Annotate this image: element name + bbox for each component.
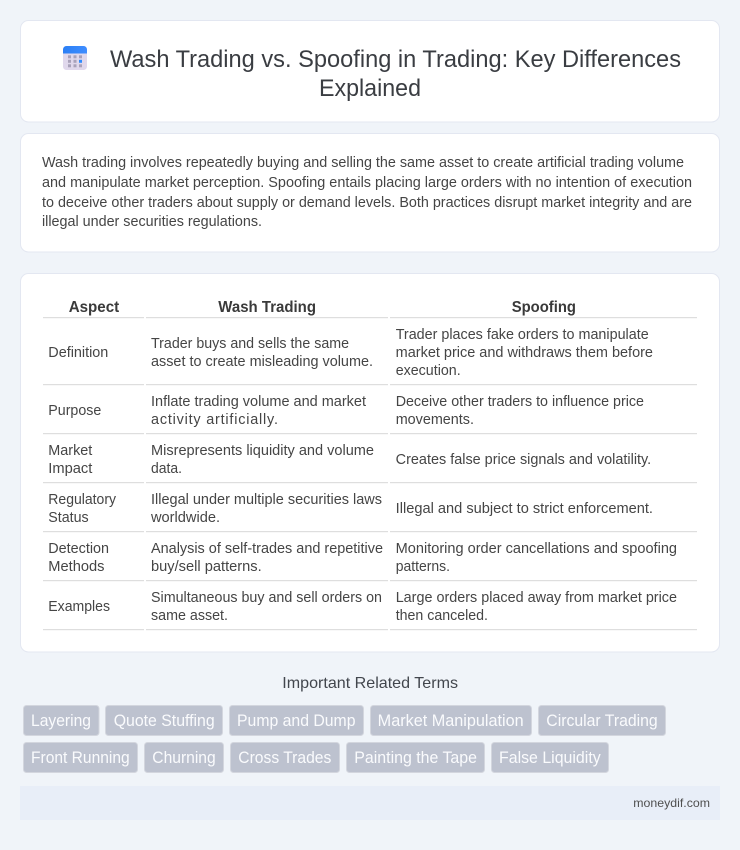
row: regulatory status: Regulatory <box>48 492 117 508</box>
table header: Wash Trading <box>218 299 316 316</box>
row: definition: asset to create misleading volume. <box>151 354 373 370</box>
tag: front running <box>24 742 138 772</box>
row: purpose: Purpose <box>48 403 101 419</box>
title: Explained <box>319 75 421 102</box>
row: regulatory status: Illegal and subject to strict enforcement. <box>396 501 653 517</box>
intro text: illegal under securities regulations. <box>42 214 262 230</box>
table header <box>69 299 576 316</box>
tag: pump and dump <box>230 706 364 736</box>
row: market impact: data. <box>151 461 182 477</box>
tag: pump and dump: Pump and Dump <box>237 712 356 730</box>
row: examples: Examples <box>48 599 110 615</box>
title: Wash Trading vs. Spoofing in Trading: Key Differences <box>110 46 681 73</box>
title <box>110 46 681 102</box>
row: examples: then canceled. <box>396 608 488 624</box>
row: detection methods: Monitoring order cancellations and spoofing <box>396 541 677 557</box>
row: market impact: Market <box>48 443 92 459</box>
row: detection methods: patterns. <box>396 559 450 575</box>
row: definition: Trader places fake orders to manipulate <box>396 327 649 343</box>
tag: front running: Front Running <box>31 749 130 767</box>
row: examples: Simultaneous buy and sell orders on <box>151 590 382 606</box>
row: definition: execution. <box>396 363 461 379</box>
row: definition <box>48 327 653 379</box>
row: market impact: Misrepresents liquidity and volume <box>151 443 374 459</box>
row: examples: Large orders placed away from market price <box>396 590 677 606</box>
tag: circular trading: Circular Trading <box>546 712 658 730</box>
intro text: to deceive other traders about supply or demand levels. Both practices disrupt market integrity and are <box>42 195 692 211</box>
row: market impact: Creates false price signals and volatility. <box>396 452 651 468</box>
row: detection methods: Detection <box>48 541 109 557</box>
intro text: and manipulate market perception. Spoofing entails placing large orders with no intention of execution <box>42 175 692 191</box>
row: market impact: Impact <box>48 461 92 477</box>
tag: cross trades <box>230 742 340 772</box>
tag: market manipulation: Market Manipulation <box>378 712 524 730</box>
tag: quote stuffing <box>106 706 222 736</box>
heading: important related terms: Important Related Terms <box>282 675 458 692</box>
tag: market manipulation <box>370 706 532 736</box>
row: detection methods <box>48 541 677 575</box>
row: examples <box>48 590 677 624</box>
tag: churning <box>144 742 224 772</box>
tag: circular trading <box>538 706 666 736</box>
intro text <box>42 155 692 230</box>
row: purpose: activity artificially. <box>151 412 278 428</box>
table header: Aspect <box>69 299 120 316</box>
tag: cross trades: Cross Trades <box>238 749 331 767</box>
panel: comparison table <box>20 274 720 652</box>
footer bar <box>20 786 720 820</box>
table header: Spoofing <box>512 299 576 316</box>
row: regulatory status: worldwide. <box>150 510 220 526</box>
row: regulatory status: Illegal under multiple securities laws <box>151 492 382 508</box>
footer source text: moneydif.com <box>633 796 710 810</box>
row: definition: Trader buys and sells the same <box>151 336 349 352</box>
panel: title header <box>20 20 720 122</box>
tag: painting the tape <box>346 742 484 772</box>
intro text: Wash trading involves repeatedly buying and selling the same asset to create artificial trading volume <box>42 155 684 171</box>
tag: churning: Churning <box>152 749 216 767</box>
row: regulatory status <box>48 492 653 526</box>
icon: calendar <box>63 46 87 70</box>
tag: painting the tape: Painting the Tape <box>354 749 477 767</box>
row: definition: Definition <box>48 345 108 361</box>
row: purpose <box>48 394 644 428</box>
tags: related terms <box>24 706 666 772</box>
tag: false liquidity <box>492 742 608 772</box>
row: purpose: Deceive other traders to influence price <box>396 394 644 410</box>
tag: quote stuffing: Quote Stuffing <box>114 712 215 730</box>
row: market impact <box>48 443 651 477</box>
row: examples: same asset. <box>151 608 228 624</box>
row: regulatory status: Status <box>48 510 89 526</box>
panel: introduction <box>20 134 720 252</box>
row: detection methods: Methods <box>48 559 104 575</box>
row: detection methods: Analysis of self-trades and repetitive <box>151 541 383 557</box>
row: purpose: Inflate trading volume and market <box>151 394 366 410</box>
row: detection methods: buy/sell patterns. <box>151 559 262 575</box>
tag: layering <box>24 706 99 736</box>
row: purpose: movements. <box>396 412 474 428</box>
tag: layering: Layering <box>31 712 91 730</box>
tag: false liquidity: False Liquidity <box>499 749 602 767</box>
row: definition: market price and withdraws them before <box>396 345 653 361</box>
